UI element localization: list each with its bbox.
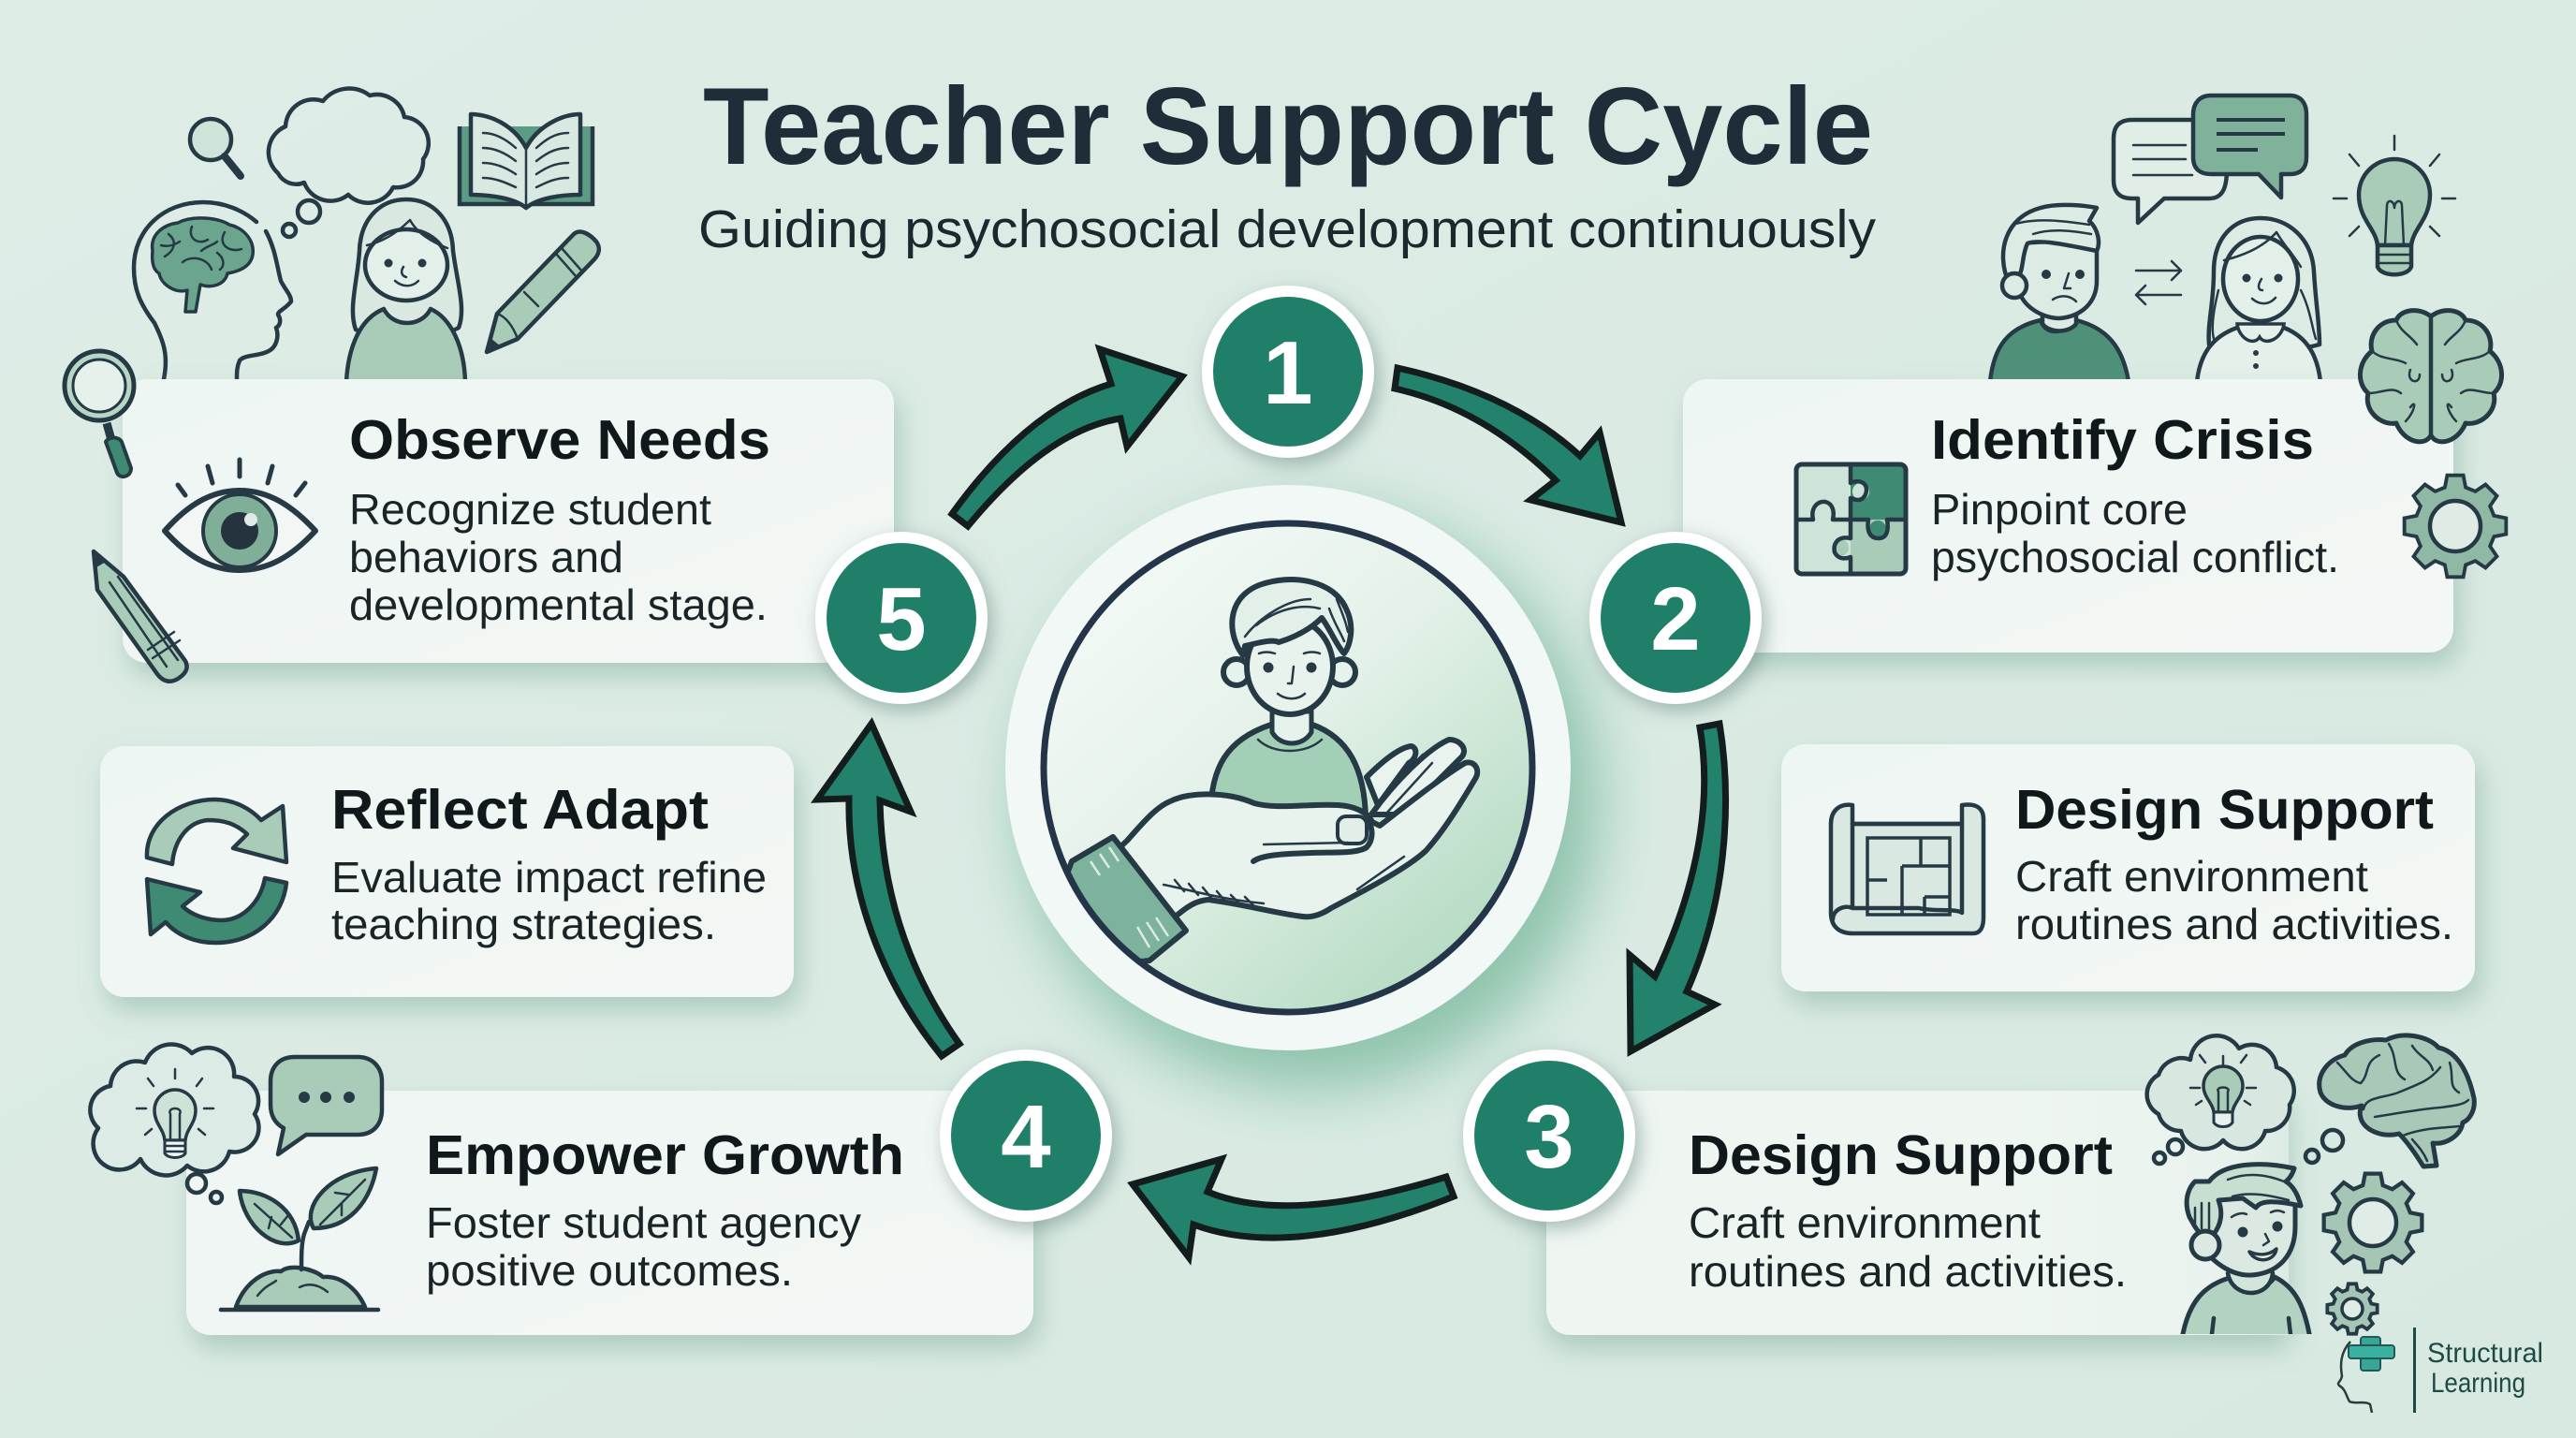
card background [123, 379, 894, 663]
panel: identify crisis [1683, 379, 2453, 653]
step badges [815, 286, 1762, 1222]
icon: small magnifier [190, 119, 241, 176]
thumb line and nail [1164, 755, 1432, 906]
illustration: observing student group [134, 89, 599, 382]
logo text [2427, 1338, 2543, 1399]
icon: gear [2405, 476, 2506, 577]
child and hand [1030, 580, 1477, 974]
heading: Reflect Adapt [331, 779, 709, 841]
arrow: step 5 to 1 [952, 349, 1182, 526]
cycle arrows [817, 349, 1725, 1257]
icon: boy with worried face [1990, 205, 2129, 382]
badge 2: 2 [1650, 569, 1701, 669]
badge 2 [1589, 532, 1762, 704]
heading: Empower Growth [426, 1124, 904, 1186]
badge 3: 3 [1524, 1087, 1574, 1187]
child neck [1272, 712, 1311, 743]
description: positive outcomes. [426, 1246, 793, 1295]
icon: idea cloud [90, 1045, 258, 1203]
badge 4 [940, 1049, 1112, 1222]
icon: lower pencil [94, 551, 187, 682]
icon: thought cloud [269, 89, 429, 237]
child face [1247, 619, 1333, 714]
child features [1258, 652, 1322, 751]
description [1931, 485, 2339, 581]
description: teaching strategies. [331, 900, 716, 948]
card background [1683, 379, 2453, 653]
panel: observe needs [123, 379, 894, 663]
illustration: identifying crisis group [1990, 95, 2455, 382]
panel: empower growth [90, 1045, 1033, 1335]
card background [100, 746, 794, 997]
child hair [1232, 580, 1351, 655]
icon: eye [165, 460, 315, 570]
badge 5 [815, 532, 988, 704]
description: Foster student agency [426, 1198, 861, 1247]
icon: boy smiling [2182, 1165, 2310, 1339]
icon: open book [460, 114, 593, 208]
icon: idea cloud [2147, 1035, 2294, 1149]
description [1689, 1198, 2127, 1296]
description [2015, 852, 2453, 948]
shirt cuff [1067, 833, 1189, 964]
description: routines and activities. [2015, 900, 2453, 948]
icon: speech bubble with dots [271, 1057, 382, 1154]
heading: Identify Crisis [1931, 409, 2314, 471]
panel: design support (right) [1781, 744, 2475, 991]
description: behaviors and [349, 533, 623, 581]
heading: Observe Needs [349, 409, 770, 471]
description [349, 485, 768, 629]
description: Pinpoint core [1931, 485, 2188, 534]
icon: lightbulb [2334, 136, 2455, 274]
badge 1: 1 [1263, 323, 1313, 423]
icon: brain top view [2360, 311, 2502, 442]
icon: puzzle [1796, 464, 1906, 574]
title: Teacher Support Cycle [703, 65, 1873, 187]
description: routines and activities. [1689, 1247, 2127, 1296]
badge 1 [1202, 286, 1374, 458]
arrow: step 3 to 4 [1133, 1159, 1454, 1257]
disc outline [1044, 523, 1532, 1012]
description: developmental stage. [349, 580, 768, 629]
outer white ring [1005, 485, 1571, 1050]
child body [1210, 725, 1366, 819]
child ears [1223, 659, 1355, 685]
badge 3 [1463, 1049, 1635, 1222]
badge 5: 5 [876, 569, 927, 669]
logo divider [2413, 1328, 2416, 1413]
icon: head profile with brain [134, 202, 291, 379]
description: Craft environment [2015, 852, 2368, 901]
description: psychosocial conflict. [1931, 533, 2339, 581]
central illustration: hand holding child [1005, 485, 1599, 1089]
card background [186, 1091, 1033, 1335]
icon: refresh arrows [147, 800, 286, 943]
thought dots [2154, 1130, 2343, 1164]
icon: speech bubbles [2114, 95, 2306, 223]
card background [1781, 744, 2475, 991]
icon: logo head [2338, 1342, 2372, 1413]
subtitle: Guiding psychosocial development continuously [698, 199, 1877, 259]
logo text: Structural [2427, 1338, 2543, 1369]
icon: small gear [2327, 1284, 2378, 1334]
icon: large gear [2324, 1174, 2422, 1271]
icon: exchange arrows [2136, 261, 2181, 304]
arrow: step 4 to 5 [817, 724, 959, 1056]
panel: design support (bottom) [1546, 1091, 2289, 1335]
badge 4: 4 [1001, 1087, 1051, 1187]
icon: pencil [487, 232, 599, 352]
icon: girl [346, 199, 465, 382]
description: Recognize student [349, 485, 711, 534]
arrow: step 2 to 3 [1630, 724, 1725, 1051]
open hand [1121, 760, 1481, 919]
panel: reflect adapt [100, 746, 794, 997]
icon: blueprint [1831, 805, 1983, 933]
description [331, 853, 767, 948]
description [426, 1198, 861, 1295]
arrow: step 1 to 2 [1395, 368, 1621, 522]
logo text: Learning [2431, 1368, 2525, 1399]
card background [1546, 1091, 2289, 1335]
hand back fingers [1367, 740, 1464, 814]
icon: logo cross [2349, 1337, 2394, 1371]
icon: brain side view [2320, 1035, 2474, 1167]
description: Evaluate impact refine [331, 853, 767, 902]
heading: Design Support [2015, 779, 2434, 841]
icon: sprout [221, 1168, 378, 1310]
logo: Structural Learning [2338, 1328, 2543, 1413]
disc shadow [1022, 512, 1599, 1089]
icon: big magnifier [65, 351, 134, 477]
icon: girl with collar [2197, 218, 2320, 382]
heading: Design Support [1689, 1124, 2113, 1186]
description: Craft environment [1689, 1198, 2041, 1247]
inner disc [1044, 523, 1532, 1012]
illustration: bottom right thinking student [2147, 1035, 2474, 1339]
